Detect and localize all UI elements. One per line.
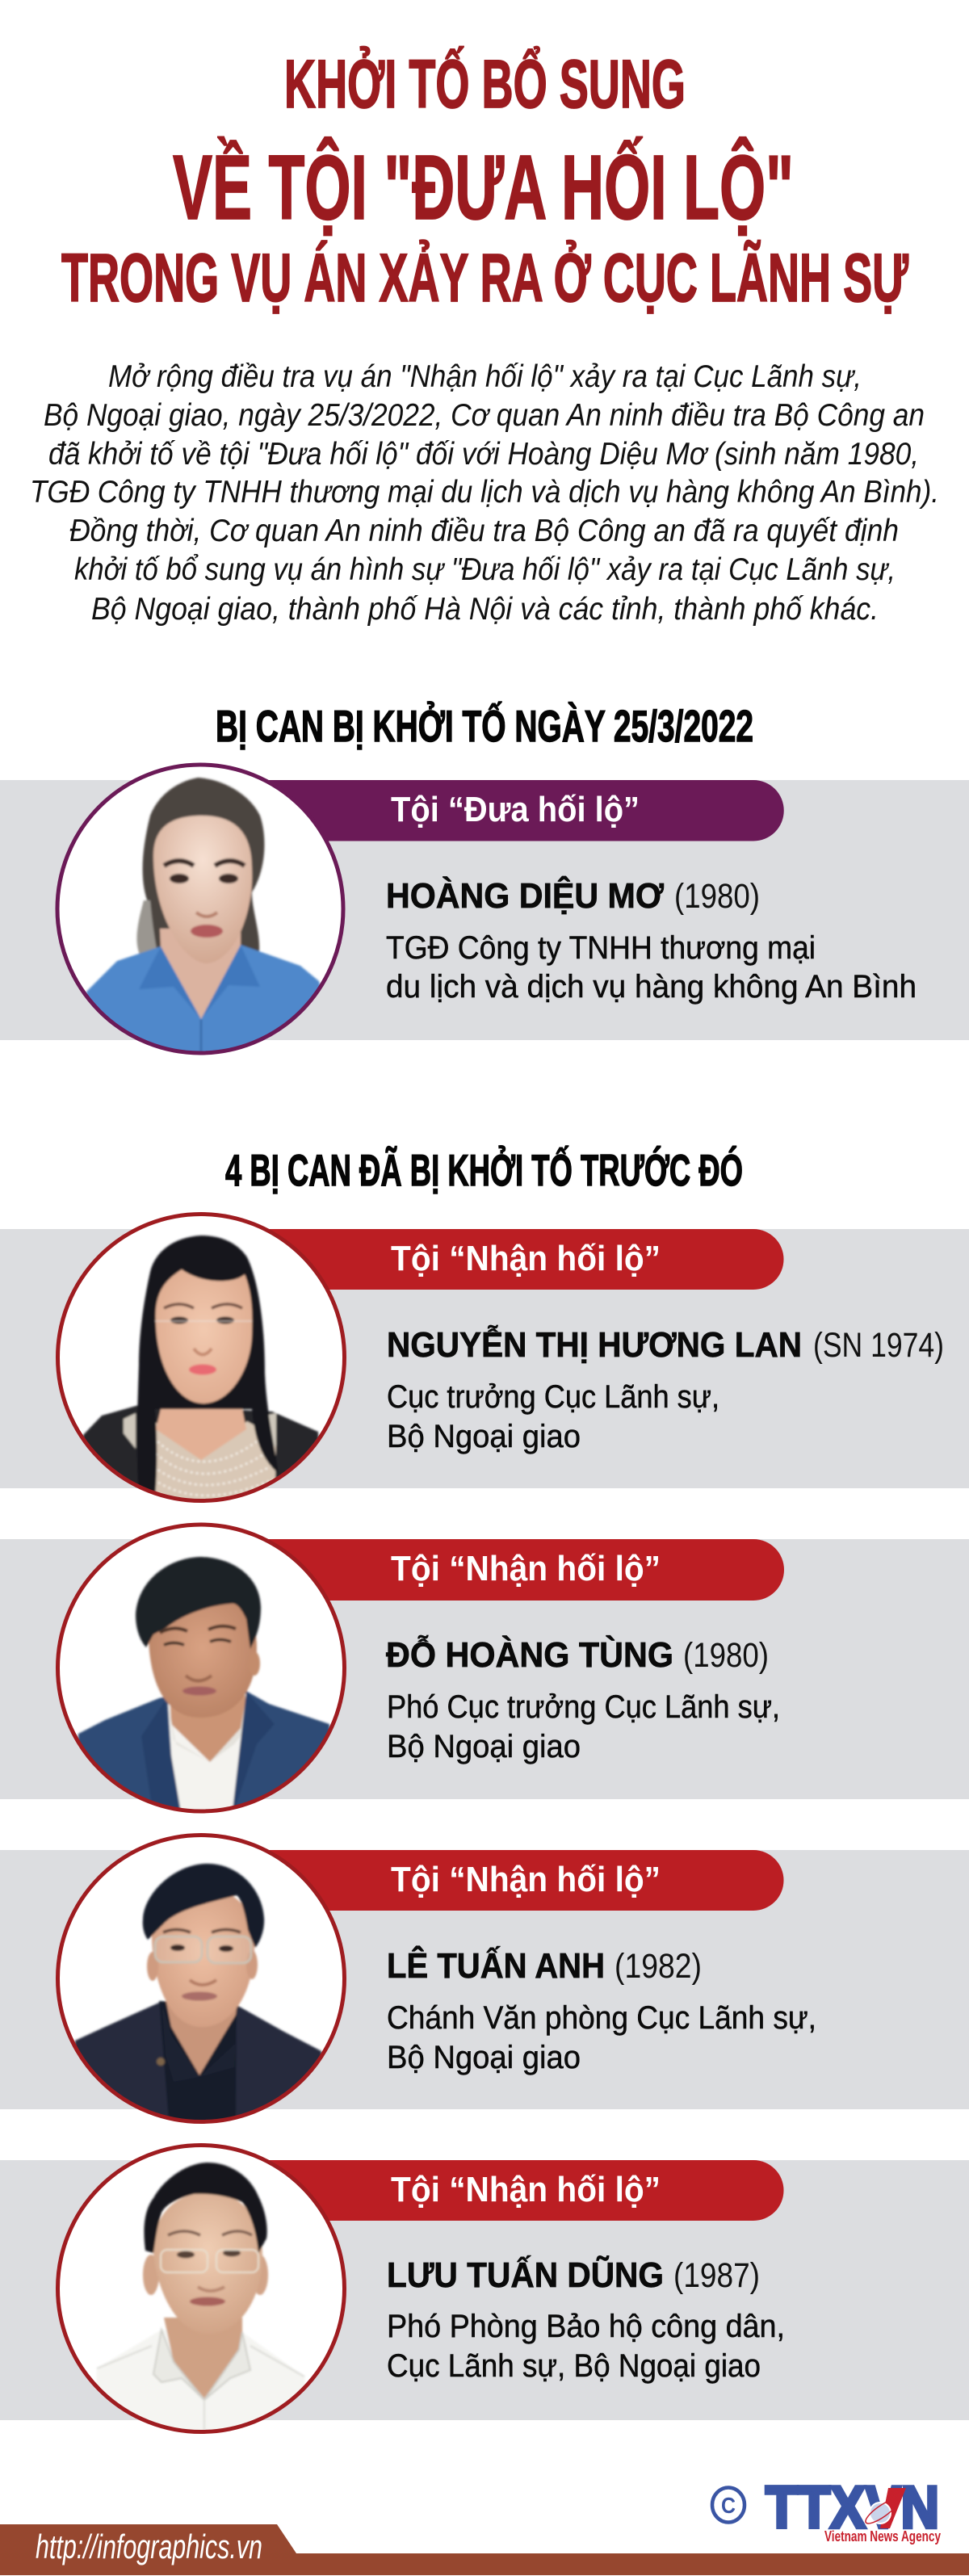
portrait: Lê Tuấn Anh: [58, 1835, 344, 2140]
title: [61, 46, 908, 316]
title: KHỞI TỐ BỔ SUNG: [284, 46, 686, 122]
intro paragraph: Bộ Ngoại giao, thành phố Hà Nội và các tỉnh, thành phố khác.: [91, 592, 879, 627]
person details: du lịch và dịch vụ hàng không An Bình: [386, 969, 917, 1005]
charge pill: bribe giving: [162, 780, 784, 841]
panel: Đỗ Hoàng Tùng: [0, 1525, 969, 1825]
person details: [387, 2255, 785, 2384]
charge pill: bribe taking: [162, 2160, 784, 2221]
wordmark: TTXVN: [766, 2475, 939, 2540]
charge pill: bribe taking: [162, 1229, 784, 1290]
portrait: Hoàng Diệu Mơ: [57, 765, 343, 1074]
intro paragraph: Mở rộng điều tra vụ án "Nhận hối lộ" xảy ra tại Cục Lãnh sự,: [108, 359, 862, 394]
panel: Lưu Tuấn Dũng: [0, 2145, 969, 2447]
portrait: Đỗ Hoàng Tùng: [58, 1525, 344, 1825]
intro paragraph: [30, 359, 939, 627]
person details: LƯU TUẤN DŨNG: [387, 2255, 664, 2295]
footer band: [0, 2524, 969, 2575]
portrait: Lưu Tuấn Dũng: [58, 2145, 344, 2447]
person details: TGĐ Công ty TNHH thương mại: [386, 930, 816, 966]
person details: ĐỖ HOÀNG TÙNG: [386, 1634, 673, 1675]
person details: Cục Lãnh sự, Bộ Ngoại giao: [387, 2348, 761, 2384]
person details: (1980): [683, 1636, 769, 1675]
person details: LÊ TUẤN ANH: [387, 1945, 605, 1986]
icon: copyright: C: [721, 2493, 736, 2518]
footer url: http://infographics.vn: [36, 2528, 262, 2566]
person details: Cục trưởng Cục Lãnh sự,: [387, 1379, 719, 1415]
charge pill: bribe taking: [162, 1850, 784, 1911]
person details: (1982): [615, 1947, 702, 1986]
charge pill: bribe giving: Tội “Đưa hối lộ”: [391, 790, 640, 829]
icon: copyright: [712, 2487, 745, 2523]
portrait: Nguyễn Thị Hương Lan: [58, 1215, 344, 1518]
heading: accused on 25/3/2022: BỊ CAN BỊ KHỞI TỐ NGÀY 25/3/2022: [216, 701, 753, 751]
person details: [387, 1945, 816, 2075]
icon: red V and globe: [862, 2488, 906, 2528]
person details: [386, 1634, 780, 1764]
person details: Bộ Ngoại giao: [387, 1419, 581, 1454]
person details: (1987): [673, 2256, 760, 2295]
charge pill: bribe taking: [162, 1539, 784, 1601]
person details: HOÀNG DIỆU MƠ: [386, 875, 664, 916]
panel: Lê Tuấn Anh: [0, 1835, 969, 2140]
charge pill: bribe taking: Tội “Nhận hối lộ”: [391, 1239, 661, 1278]
panel: Nguyễn Thị Hương Lan: [0, 1215, 969, 1518]
person details: Bộ Ngoại giao: [387, 2040, 581, 2075]
person details: Phó Cục trưởng Cục Lãnh sự,: [387, 1689, 780, 1725]
person details: (SN 1974): [813, 1326, 944, 1365]
person details: [387, 1324, 944, 1454]
charge pill: bribe taking: Tội “Nhận hối lộ”: [391, 1549, 661, 1588]
intro paragraph: Đồng thời, Cơ quan An ninh điều tra Bộ Công an đã ra quyết định: [69, 514, 899, 548]
person details: [386, 875, 917, 1005]
person details: NGUYỄN THỊ HƯƠNG LAN: [387, 1324, 802, 1365]
panel: Hoàng Diệu Mơ: [0, 765, 969, 1074]
charge pill: bribe taking: Tội “Nhận hối lộ”: [391, 2170, 661, 2209]
person details: (1980): [674, 877, 760, 916]
person details: Chánh Văn phòng Cục Lãnh sự,: [387, 2000, 816, 2036]
charge pill: bribe taking: Tội “Nhận hối lộ”: [391, 1860, 661, 1899]
person details: Phó Phòng Bảo hộ công dân,: [387, 2309, 785, 2344]
person details: Bộ Ngoại giao: [387, 1729, 581, 1764]
logo: copyright TTXVN: [712, 2475, 941, 2545]
